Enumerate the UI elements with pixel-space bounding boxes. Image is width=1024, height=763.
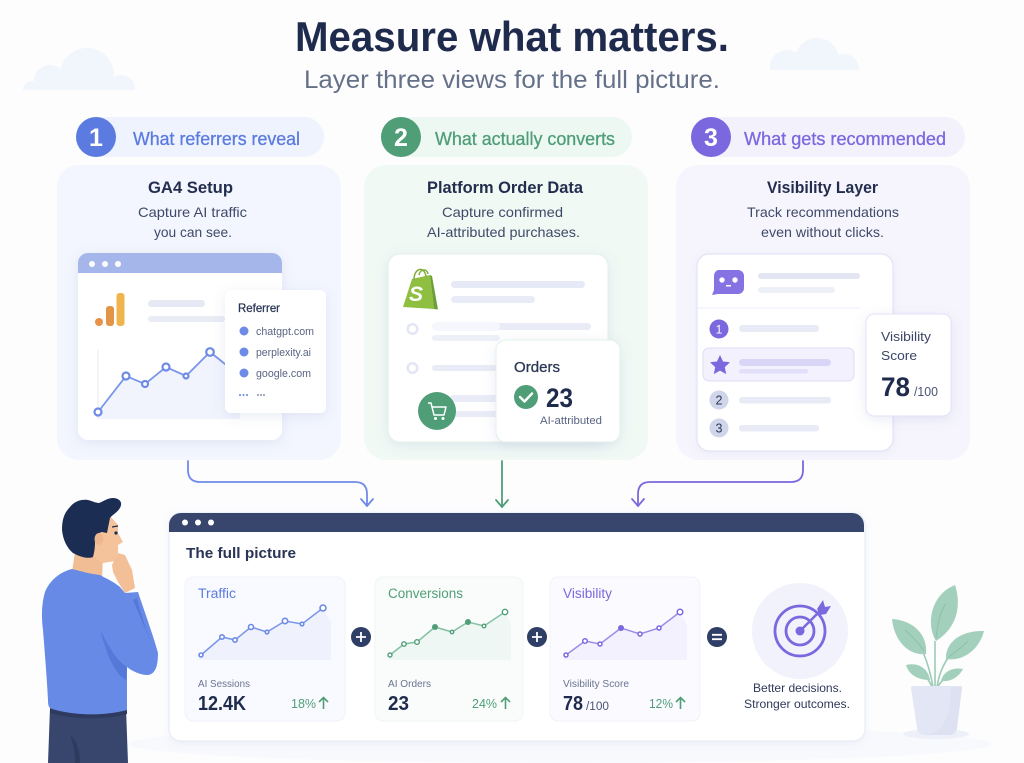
ear bbox=[94, 533, 104, 545]
panel description bbox=[138, 204, 247, 240]
icon: shopping cart bbox=[418, 392, 456, 430]
card: conversions: Conversions bbox=[388, 586, 463, 601]
recommendation list card bbox=[697, 254, 893, 451]
operator: plus bbox=[351, 627, 371, 647]
outcome text: Better decisions. bbox=[753, 681, 842, 695]
card: visibility: Visibility bbox=[563, 586, 612, 601]
pill 1: what referrers reveal: What referrers reveal bbox=[133, 129, 300, 149]
arrow: referrers to dashboard bbox=[188, 461, 373, 506]
icon: shopping bag logo: S bbox=[409, 283, 423, 306]
hair bbox=[62, 498, 121, 558]
panel description: you can see. bbox=[154, 224, 232, 240]
line chart: traffic bbox=[198, 605, 331, 660]
decorative cloud left bbox=[23, 48, 135, 90]
referrer card: google.com bbox=[256, 368, 311, 380]
neck bbox=[72, 552, 103, 580]
orders card: 23 bbox=[546, 383, 573, 413]
card: conversions: AI Orders bbox=[388, 678, 431, 690]
pill 2: what actually converts bbox=[381, 117, 632, 157]
card: traffic: AI Sessions bbox=[198, 678, 250, 690]
visibility score card: Visibility bbox=[881, 329, 932, 344]
hand bbox=[112, 553, 135, 593]
pill 3: what gets recommended: What gets recommended bbox=[744, 129, 946, 149]
panel description: Capture confirmed bbox=[442, 204, 563, 220]
orders card bbox=[496, 340, 620, 442]
orders card: AI-attributed bbox=[540, 415, 602, 427]
visibility score card bbox=[866, 314, 951, 416]
panel description: Track recommendations bbox=[747, 204, 899, 220]
card: visibility: 12% bbox=[649, 697, 673, 711]
illustration: potted plant bbox=[892, 585, 984, 739]
pill 1: what referrers reveal bbox=[76, 117, 324, 157]
panel: platform order data bbox=[364, 165, 648, 460]
order list card bbox=[388, 254, 608, 442]
title: Measure what matters. bbox=[295, 13, 729, 60]
decorative cloud right bbox=[770, 38, 859, 70]
operator: equals bbox=[707, 627, 727, 647]
card: traffic: 18% bbox=[291, 697, 316, 711]
pill 2: what actually converts: What actually converts bbox=[435, 129, 615, 149]
card: traffic: Traffic bbox=[198, 586, 236, 601]
arrow: visibility to dashboard bbox=[632, 461, 803, 506]
dashboard heading: The full picture bbox=[186, 545, 296, 562]
card: visibility: /100 bbox=[586, 701, 609, 713]
subtitle: Layer three views for the full picture. bbox=[304, 66, 720, 94]
icon: chat bot bbox=[712, 270, 744, 295]
panel: visibility layer bbox=[676, 165, 970, 460]
line chart: visibility bbox=[563, 609, 687, 660]
card: conversions: 23 bbox=[388, 693, 409, 715]
icon: star bbox=[710, 355, 730, 374]
referrer card bbox=[225, 290, 326, 413]
visibility score card: /100 bbox=[914, 385, 938, 399]
face bbox=[92, 516, 123, 563]
card: traffic: 12.4K bbox=[198, 693, 246, 715]
referrer card: perplexity.ai bbox=[256, 347, 311, 359]
visibility score card: 78 bbox=[881, 372, 910, 402]
icon: target with arrow bbox=[752, 583, 848, 679]
referrer card: Referrer bbox=[238, 301, 280, 315]
recommendation list card: 1 bbox=[716, 322, 723, 336]
line chart: conversions bbox=[388, 609, 511, 660]
panel description: AI-attributed purchases. bbox=[427, 224, 580, 240]
panel heading: GA4 Setup: GA4 Setup bbox=[148, 178, 233, 197]
icon: analytics bars bbox=[95, 293, 124, 326]
outcome text: Stronger outcomes. bbox=[744, 697, 850, 711]
recommendation list card: 2 bbox=[716, 394, 723, 408]
dashboard: the full picture bbox=[169, 513, 865, 741]
panel heading: Platform Order Data: Platform Order Data bbox=[427, 178, 584, 197]
card: visibility: 78 bbox=[563, 693, 583, 715]
illustration: thinking person bbox=[42, 498, 158, 763]
operator: plus bbox=[527, 627, 547, 647]
pill 3: what gets recommended: 3 bbox=[704, 124, 718, 152]
pill 1: what referrers reveal: 1 bbox=[89, 124, 103, 152]
panel description: Capture AI traffic bbox=[138, 204, 247, 220]
floor shadow bbox=[128, 725, 992, 763]
pill 3: what gets recommended bbox=[691, 117, 965, 157]
panel description: even without clicks. bbox=[761, 224, 884, 240]
card: conversions: 24% bbox=[472, 697, 497, 711]
panel heading: Visibility Layer: Visibility Layer bbox=[767, 178, 878, 197]
shirt bbox=[42, 569, 158, 714]
card: visibility: Visibility Score bbox=[563, 678, 629, 690]
card: visibility bbox=[550, 577, 700, 721]
card: traffic bbox=[185, 577, 345, 721]
card: conversions bbox=[375, 577, 523, 721]
visibility score card: Score bbox=[881, 348, 917, 363]
outcome text bbox=[744, 681, 850, 711]
browser window with line chart bbox=[78, 253, 282, 440]
arrow: orders to dashboard bbox=[496, 461, 508, 507]
orders card: Orders bbox=[514, 359, 560, 376]
referrer card: chatgpt.com bbox=[256, 326, 314, 338]
recommendation list card: 3 bbox=[716, 422, 723, 436]
pill 2: what actually converts: 2 bbox=[394, 124, 408, 152]
icon: shopping bag logo bbox=[403, 269, 438, 310]
panel description bbox=[747, 204, 899, 240]
panel description bbox=[427, 204, 580, 240]
panel: GA4 setup bbox=[57, 165, 341, 460]
